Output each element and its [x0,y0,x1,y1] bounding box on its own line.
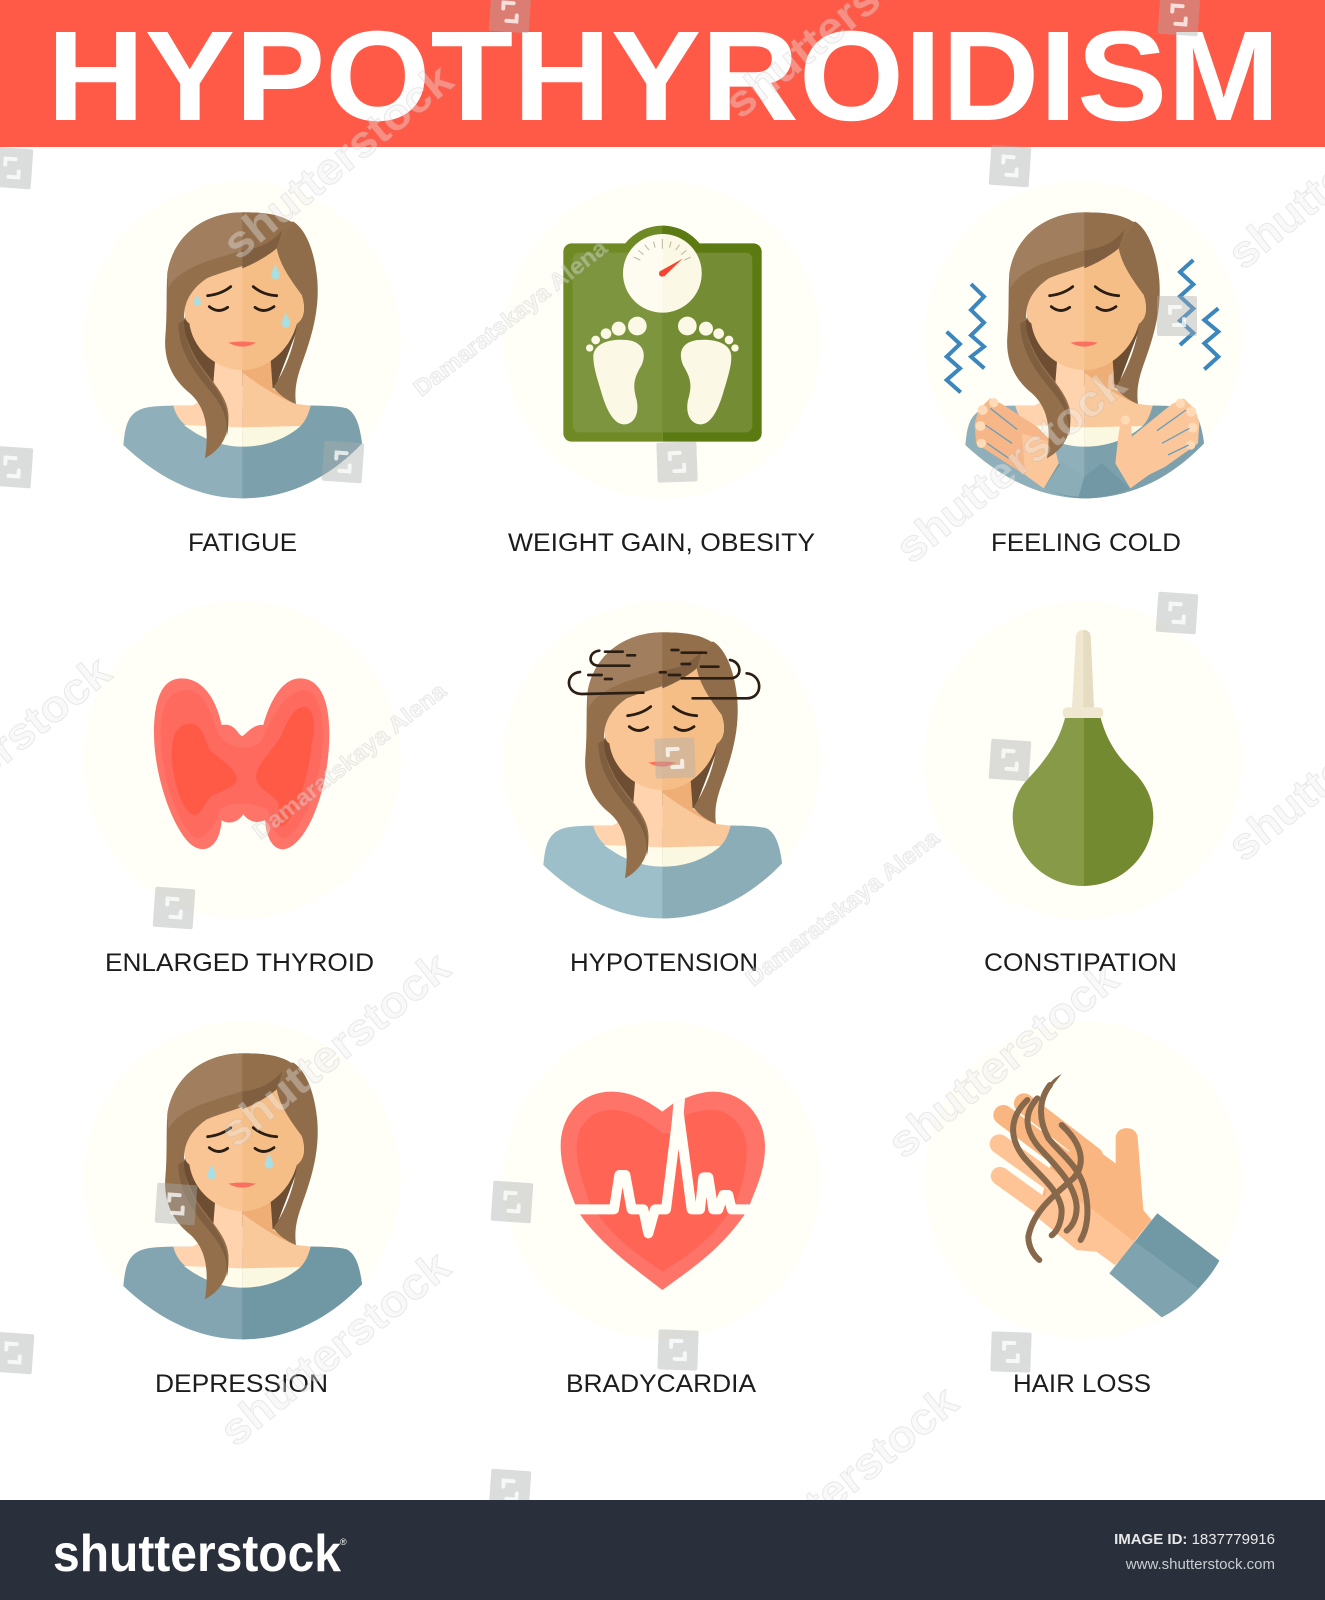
label: FEELING COLD [991,529,1181,557]
watermark overlay: Damaratskaya Alena [740,824,944,991]
panel: feeling cold [944,212,1222,551]
watermark overlay: shutterstock [719,1376,968,1591]
label: FATIGUE [188,529,297,557]
icon: shivering woman with crossed hands [965,212,1204,498]
registered mark: ® [340,1537,347,1547]
icon: hand holding hair [999,1074,1219,1317]
label: ENLARGED THYROID [105,949,374,977]
icon: thyroid gland [154,678,329,849]
panel: weight gain [503,181,821,557]
label: DEPRESSION [155,1370,328,1398]
panel: hair loss [924,1021,1242,1398]
panel: depression [123,1053,362,1392]
icon: cold zigzags [947,260,1218,392]
title: HYPOTHYROIDISM [47,5,1280,148]
watermark overlay: Damaratskaya Alena [247,677,451,844]
label: HAIR LOSS [1013,1370,1151,1398]
label: BRADYCARDIA [566,1370,756,1398]
watermark overlay: shutterstock [214,54,463,269]
icon: heart with pulse [561,1092,765,1290]
image id: IMAGE ID: 1837779916 [1114,1531,1275,1548]
title banner [0,0,1325,148]
icon: dizzy wind lines [569,650,759,698]
icon: bathroom scale [563,226,762,442]
footer bar [0,1500,1325,1600]
panel: constipation [924,601,1242,977]
icon: dizzy woman [543,632,782,918]
label: WEIGHT GAIN, OBESITY [508,529,815,557]
website: www.shutterstock.com [1125,1556,1275,1573]
label: CONSTIPATION [984,949,1177,977]
watermark overlay: shutterstock [879,953,1128,1168]
label: HYPOTENSION [570,949,758,977]
panel: fatigue [123,212,362,551]
panel: bradycardia [503,1021,821,1398]
watermark overlay: shutterstock [211,1241,460,1456]
icon: crying woman [123,1053,362,1339]
watermark overlay: Damaratskaya Alena [408,234,612,401]
watermark overlay: shutterstock [211,942,460,1157]
panel: enlarged thyroid [83,601,401,977]
panel: hypotension [543,632,782,971]
icon: enema bulb [1013,630,1153,886]
watermark overlay: shutterstock [887,358,1136,573]
footer logo: shutterstock [53,1525,341,1583]
icon: tired woman with sweat drops [123,212,362,498]
